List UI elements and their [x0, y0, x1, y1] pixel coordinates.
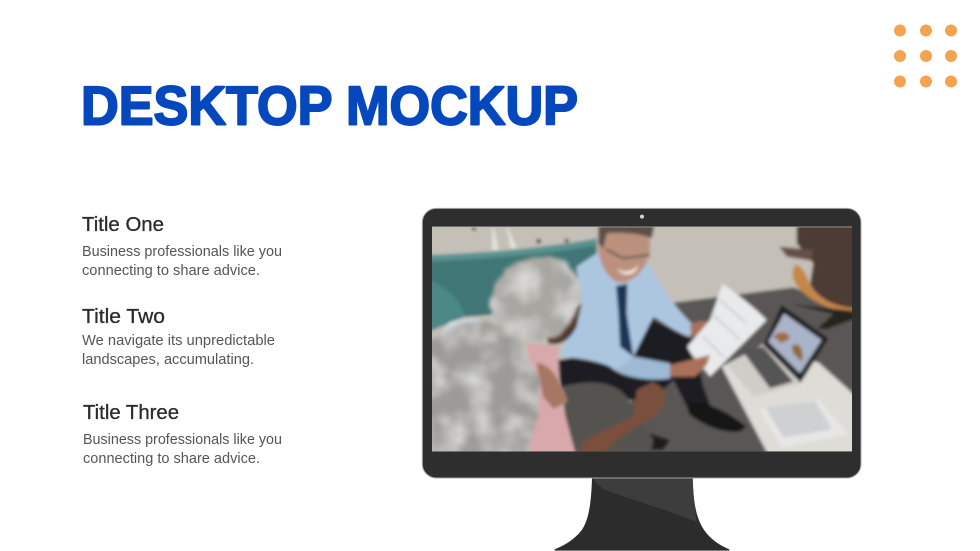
text block: title three — [83, 402, 282, 467]
monitor bezel — [422, 208, 861, 478]
title: DESKTOP MOCKUP — [81, 76, 578, 136]
man: shirt — [558, 250, 693, 379]
dark rug — [627, 287, 860, 458]
text block: title two: We navigate its unpredictable — [82, 332, 275, 349]
green sofa — [425, 239, 597, 320]
decorative dot grid — [894, 24, 957, 88]
text block: title one — [82, 214, 282, 279]
rear woman hair — [492, 256, 582, 340]
text block: title three: connecting to share advice. — [83, 450, 260, 467]
paper document — [687, 284, 767, 377]
floor carpet — [432, 226, 816, 452]
screen top highlight — [432, 226, 852, 228]
laptop — [727, 344, 802, 397]
hands — [690, 321, 718, 337]
foreground woman hair — [432, 319, 541, 452]
monitor stand — [555, 478, 729, 551]
screen photo: people at a meeting — [432, 226, 852, 452]
man: trousers — [558, 320, 713, 413]
woman pink top — [527, 342, 577, 458]
text block: title one: Business professionals like you — [82, 243, 282, 260]
man: head — [598, 227, 650, 283]
webcam — [640, 215, 644, 219]
foreground white blouse — [440, 317, 483, 335]
woman neck — [540, 303, 582, 344]
text block: title two — [82, 306, 275, 368]
text block: title one: connecting to share advice. — [82, 262, 260, 279]
text block: title three: Title Three — [83, 402, 179, 424]
chair — [794, 226, 852, 311]
hand on shoulder — [537, 363, 568, 408]
text block: title one: Title One — [82, 214, 164, 236]
woman grey trousers and arm — [562, 382, 653, 458]
knee hand over paper — [670, 355, 710, 377]
text block: title two: Title Two — [82, 306, 165, 328]
text block: title three: Business professionals like you — [83, 431, 282, 448]
table — [720, 356, 852, 452]
text block: title two: landscapes, accumulating. — [82, 351, 254, 368]
man: tie — [616, 284, 633, 357]
desktop monitor — [422, 208, 861, 551]
